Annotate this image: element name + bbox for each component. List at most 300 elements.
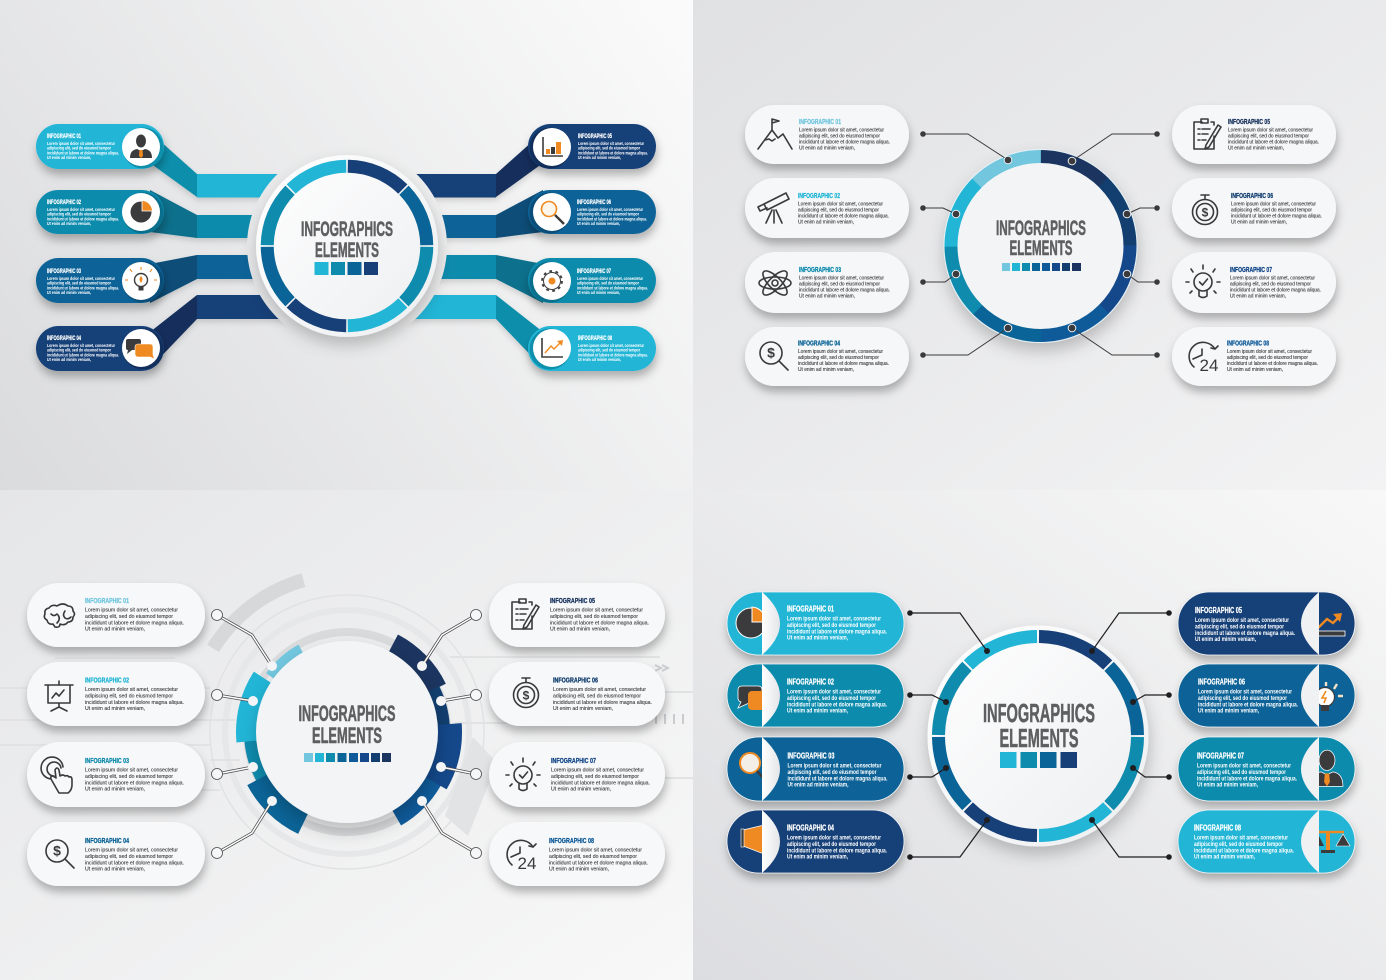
text: infographic 08: Lorem ipsum dolor sit amet, consectetur: [549, 848, 642, 854]
text: infographic 05: Ut enim ad minim veniam,: [550, 627, 610, 633]
pill: infographic 05: [528, 124, 656, 169]
text: infographic 01: Lorem ipsum dolor sit amet, consectetur: [47, 141, 115, 146]
text: infographic 03: adipiscing elit, sed do eiusmod tempor: [85, 774, 173, 780]
text: infographic 02: Ut enim ad minim veniam,: [47, 221, 91, 226]
text: infographic 01: adipiscing elit, sed do eiusmod tempor: [799, 134, 880, 140]
text: infographic 07: INFOGRAPHIC 07: [551, 756, 596, 765]
ribbon 07: [426, 255, 543, 303]
icon: rising arrow: [1316, 613, 1345, 636]
crescent divider: [1301, 810, 1319, 873]
pill: infographic 03: [745, 252, 909, 313]
text: infographic 03: incididunt ut labore et dolore magna aliqua.: [799, 288, 890, 294]
text: infographic 02: Ut enim ad minim veniam,: [787, 709, 848, 715]
text: infographic 07: Ut enim ad minim veniam,: [551, 787, 611, 793]
crescent divider: [1301, 592, 1319, 655]
text: infographic 01: adipiscing elit, sed do eiusmod tempor: [85, 614, 173, 620]
text: infographic 02: adipiscing elit, sed do eiusmod tempor: [47, 212, 111, 217]
title: INFOGRAPHICS: [301, 217, 393, 241]
text: infographic 06: INFOGRAPHIC 06: [1231, 193, 1273, 200]
crescent divider: [762, 664, 780, 727]
pill: infographic 04: [36, 326, 164, 371]
ribbon 02: [150, 190, 267, 238]
icon: businessman: [1311, 750, 1343, 786]
title: INFOGRAPHICS: [996, 217, 1086, 240]
crescent divider: [1301, 737, 1319, 801]
text: infographic 07: incididunt ut labore et dolore magna aliqua.: [577, 285, 648, 290]
text: infographic 04: [85, 836, 184, 873]
text: infographic 05: INFOGRAPHIC 05: [550, 596, 596, 605]
icon: clipboard: [1194, 119, 1221, 149]
text: infographic 05: incididunt ut labore et dolore magna aliqua.: [1195, 631, 1295, 637]
icon: magnifier: [740, 753, 765, 780]
text: infographic 04: Lorem ipsum dolor sit amet, consectetur: [798, 349, 883, 355]
text: infographic 02: [85, 676, 184, 712]
title: [996, 217, 1086, 260]
icon: light bulb: [1316, 682, 1343, 711]
text: infographic 07: adipiscing elit, sed do eiusmod tempor: [1230, 282, 1311, 288]
text: infographic 08: [578, 336, 648, 362]
text: infographic 06: incididunt ut labore et dolore magna aliqua.: [553, 700, 652, 706]
text: infographic 03: [85, 756, 184, 793]
text: infographic 01: Lorem ipsum dolor sit amet, consectetur: [85, 608, 178, 614]
ribbon 05: [396, 132, 543, 198]
text: infographic 03: Lorem ipsum dolor sit amet, consectetur: [85, 768, 178, 774]
text: infographic 08: Ut enim ad minim veniam,: [578, 357, 621, 362]
text: infographic 04: adipiscing elit, sed do eiusmod tempor: [787, 842, 877, 848]
text: infographic 06: Ut enim ad minim veniam,: [553, 706, 613, 712]
pill: infographic 01: [745, 105, 909, 164]
text: infographic 02: incididunt ut labore et dolore magna aliqua.: [85, 700, 184, 706]
text: infographic 08: [549, 836, 648, 873]
text: infographic 01: Lorem ipsum dolor sit amet, consectetur: [787, 616, 882, 622]
text: infographic 03: [47, 269, 119, 295]
text: infographic 03: adipiscing elit, sed do eiusmod tempor: [799, 282, 880, 288]
text: infographic 05: adipiscing elit, sed do eiusmod tempor: [1228, 134, 1309, 140]
pill: infographic 02: [727, 664, 904, 727]
text: infographic 02: adipiscing elit, sed do eiusmod tempor: [85, 694, 173, 700]
text: infographic 05: incididunt ut labore et dolore magna aliqua.: [1228, 140, 1319, 146]
colour key squares: [1000, 752, 1077, 768]
text: infographic 05: adipiscing elit, sed do eiusmod tempor: [550, 614, 638, 620]
title: ELEMENTS: [1000, 723, 1078, 753]
text: infographic 07: [551, 756, 650, 793]
text: infographic 04: Lorem ipsum dolor sit amet, consectetur: [47, 343, 115, 348]
ribbon 08: [396, 295, 543, 368]
text: infographic 06: Lorem ipsum dolor sit amet, consectetur: [1198, 690, 1293, 696]
title: ELEMENTS: [1010, 237, 1072, 260]
text: infographic 04: INFOGRAPHIC 04: [85, 836, 130, 845]
text: infographic 04: Ut enim ad minim veniam,: [787, 855, 848, 861]
icon: bulb with check: [506, 758, 540, 790]
text: infographic 02: [47, 200, 119, 226]
pill: infographic 04: [727, 810, 904, 873]
pill: infographic 07: [489, 742, 665, 807]
title: [983, 698, 1095, 753]
pill: infographic 06: [489, 662, 665, 726]
text: infographic 07: INFOGRAPHIC 07: [577, 269, 611, 275]
text: infographic 06: adipiscing elit, sed do eiusmod tempor: [1198, 696, 1288, 702]
pill: infographic 03: [27, 742, 205, 807]
text: infographic 01: INFOGRAPHIC 01: [799, 119, 841, 126]
crescent divider: [762, 737, 780, 801]
colour key squares: [1002, 263, 1081, 271]
text: infographic 06: [1231, 193, 1322, 226]
text: infographic 02: Ut enim ad minim veniam,: [798, 220, 854, 226]
icon: chat bubbles: [122, 328, 164, 370]
pill: infographic 01: [27, 583, 205, 647]
central disc: [256, 641, 438, 823]
title: INFOGRAPHICS: [983, 698, 1095, 728]
text: infographic 01: Ut enim ad minim veniam,: [787, 636, 848, 642]
text: infographic 03: adipiscing elit, sed do eiusmod tempor: [47, 281, 111, 286]
text: infographic 05: Ut enim ad minim veniam,: [1228, 146, 1284, 152]
central disc with ring: [234, 133, 460, 359]
pill: infographic 07: [1172, 252, 1336, 313]
icon: light bulb: [122, 262, 164, 302]
text: infographic 08: adipiscing elit, sed do eiusmod tempor: [549, 854, 637, 860]
text: infographic 08: adipiscing elit, sed do eiusmod tempor: [1227, 355, 1308, 361]
text: infographic 07: adipiscing elit, sed do eiusmod tempor: [1197, 770, 1287, 776]
text: infographic 05: Lorem ipsum dolor sit amet, consectetur: [1228, 128, 1313, 134]
pill: infographic 08: [1172, 327, 1336, 386]
text: infographic 07: INFOGRAPHIC 07: [1197, 752, 1244, 760]
text: infographic 01: [799, 119, 890, 152]
ribbon 03: [150, 255, 267, 303]
text: infographic 03: INFOGRAPHIC 03: [85, 756, 129, 765]
text: infographic 04: Ut enim ad minim veniam,: [85, 867, 145, 873]
text: infographic 03: Ut enim ad minim veniam,: [85, 787, 145, 793]
icon: pie chart: [736, 607, 766, 638]
text: infographic 08: adipiscing elit, sed do eiusmod tempor: [578, 348, 640, 353]
icon: balance scales: [1312, 832, 1350, 853]
text: infographic 04: Lorem ipsum dolor sit amet, consectetur: [85, 848, 178, 854]
text: infographic 05: incididunt ut labore et dolore magna aliqua.: [578, 150, 648, 155]
title: [298, 701, 396, 748]
text: infographic 07: adipiscing elit, sed do eiusmod tempor: [551, 774, 639, 780]
icon: gear: [530, 262, 571, 302]
text: infographic 01: INFOGRAPHIC 01: [787, 604, 834, 614]
text: infographic 05: incididunt ut labore et dolore magna aliqua.: [550, 620, 649, 626]
crescent divider: [762, 810, 780, 873]
text: infographic 04: incididunt ut labore et dolore magna aliqua.: [787, 848, 887, 854]
connectors: [212, 610, 482, 858]
pill: infographic 04: [745, 327, 909, 386]
text: infographic 04: Ut enim ad minim veniam,: [798, 367, 854, 373]
text: infographic 06: adipiscing elit, sed do eiusmod tempor: [1231, 208, 1312, 214]
text: infographic 08: INFOGRAPHIC 08: [1227, 340, 1269, 348]
text: infographic 04: Lorem ipsum dolor sit amet, consectetur: [787, 836, 882, 842]
text: infographic 03: Ut enim ad minim veniam,: [47, 290, 91, 295]
text: infographic 06: [577, 200, 647, 226]
ribbon 04: [150, 295, 297, 368]
text: infographic 04: incididunt ut labore et dolore magna aliqua.: [798, 361, 889, 367]
pill: infographic 08: [528, 326, 656, 371]
text: infographic 01: adipiscing elit, sed do eiusmod tempor: [787, 623, 877, 629]
text: infographic 01: Lorem ipsum dolor sit amet, consectetur: [799, 128, 884, 134]
text: infographic 02: INFOGRAPHIC 02: [787, 678, 834, 686]
central disc with ring: [897, 595, 1179, 877]
text: infographic 01: Ut enim ad minim veniam,: [47, 155, 91, 160]
text: infographic 04: [798, 340, 889, 373]
pill: infographic 03: [727, 737, 904, 801]
crescent divider: [1301, 664, 1319, 727]
text: infographic 01: incididunt ut labore et dolore magna aliqua.: [799, 140, 890, 146]
text: infographic 04: [787, 824, 887, 861]
text: infographic 04: incididunt ut labore et dolore magna aliqua.: [85, 860, 184, 866]
text: infographic 07: Lorem ipsum dolor sit amet, consectetur: [1197, 764, 1292, 770]
text: infographic 07: Lorem ipsum dolor sit amet, consectetur: [577, 276, 643, 281]
icon: touch hand: [41, 757, 72, 793]
title: INFOGRAPHICS: [298, 701, 396, 726]
text: infographic 06: [1198, 678, 1298, 715]
pill: infographic 07: [528, 258, 656, 303]
icon: bulb with check: [1186, 265, 1220, 298]
text: infographic 01: incididunt ut labore et dolore magna aliqua.: [85, 620, 184, 626]
text: infographic 06: incididunt ut labore et dolore magna aliqua.: [1231, 214, 1322, 220]
icon: presentation board: [45, 681, 73, 711]
crescent divider: [762, 592, 780, 655]
text: infographic 05: INFOGRAPHIC 05: [578, 134, 612, 140]
icon: stopwatch: [1192, 195, 1218, 224]
text: infographic 07: Lorem ipsum dolor sit amet, consectetur: [551, 768, 644, 774]
icon: atom: [759, 267, 791, 299]
text: infographic 06: Lorem ipsum dolor sit amet, consectetur: [577, 207, 643, 212]
icon: mountain flag: [758, 119, 792, 149]
pill: infographic 03: [36, 258, 164, 303]
icon: brain: [44, 604, 74, 627]
text: infographic 06: Lorem ipsum dolor sit amet, consectetur: [1231, 202, 1316, 208]
pill: infographic 06: [528, 190, 656, 234]
central disc with ring: [914, 119, 1167, 373]
icon: stopwatch: [514, 678, 538, 708]
text: infographic 03: Ut enim ad minim veniam,: [799, 294, 855, 300]
text: infographic 08: incididunt ut labore et dolore magna aliqua.: [549, 860, 648, 866]
pill: infographic 04: [27, 822, 205, 886]
icon: dollar magnifier: [760, 342, 788, 370]
text: infographic 08: adipiscing elit, sed do eiusmod tempor: [1194, 842, 1284, 848]
text: infographic 07: Ut enim ad minim veniam,: [1230, 294, 1286, 300]
text: infographic 01: incididunt ut labore et dolore magna aliqua.: [787, 629, 887, 635]
text: infographic 02: incididunt ut labore et dolore magna aliqua.: [798, 214, 889, 220]
text: infographic 05: Lorem ipsum dolor sit amet, consectetur: [578, 141, 644, 146]
pill: infographic 06: [1178, 664, 1355, 727]
text: infographic 05: [1228, 119, 1319, 152]
pill: infographic 05: [1178, 592, 1355, 655]
pill: infographic 02: [36, 190, 164, 234]
text: infographic 02: INFOGRAPHIC 02: [85, 676, 129, 684]
text: infographic 03: INFOGRAPHIC 03: [799, 267, 841, 274]
text: infographic 08: Lorem ipsum dolor sit amet, consectetur: [1194, 836, 1289, 842]
text: infographic 06: incididunt ut labore et dolore magna aliqua.: [1198, 702, 1298, 708]
text: infographic 05: [1195, 606, 1295, 643]
text: infographic 03: INFOGRAPHIC 03: [788, 752, 835, 760]
title: ELEMENTS: [312, 723, 382, 748]
text: infographic 08: Ut enim ad minim veniam,: [549, 867, 609, 873]
text: infographic 05: Ut enim ad minim veniam,: [1195, 637, 1256, 643]
text: infographic 05: adipiscing elit, sed do eiusmod tempor: [1195, 624, 1285, 630]
text: infographic 02: adipiscing elit, sed do eiusmod tempor: [798, 208, 879, 214]
pill: infographic 02: [745, 178, 909, 238]
text: infographic 08: Lorem ipsum dolor sit amet, consectetur: [578, 343, 644, 348]
text: infographic 01: Ut enim ad minim veniam,: [799, 146, 855, 152]
icon: stopwatch: $: [523, 688, 530, 702]
icon: 24-hour clock: 24: [1200, 356, 1218, 375]
pill: infographic 08: [489, 822, 665, 886]
icon: growth chart: [530, 328, 571, 370]
text: infographic 06: [553, 676, 652, 712]
icon: stopwatch: $: [1202, 206, 1209, 220]
text: infographic 02: adipiscing elit, sed do eiusmod tempor: [787, 696, 877, 702]
text: infographic 05: [550, 596, 649, 633]
text: infographic 08: incididunt ut labore et dolore magna aliqua.: [1194, 848, 1294, 854]
text: infographic 08: incididunt ut labore et dolore magna aliqua.: [578, 352, 648, 357]
ribbon 01: [150, 132, 297, 198]
text: infographic 03: INFOGRAPHIC 03: [47, 269, 81, 275]
text: infographic 07: Ut enim ad minim veniam,: [577, 290, 620, 295]
text: infographic 07: [1197, 752, 1297, 789]
panel: bottom-right coloured pills infographic: [693, 490, 1386, 980]
text: infographic 06: INFOGRAPHIC 06: [553, 676, 598, 684]
text: infographic 02: INFOGRAPHIC 02: [798, 193, 840, 200]
ribbon 06: [426, 190, 543, 238]
text: infographic 04: [47, 336, 119, 362]
text: infographic 03: incididunt ut labore et dolore magna aliqua.: [85, 780, 184, 786]
connectors: [907, 610, 1172, 860]
panel: bottom-left circuit infographic: [0, 490, 693, 980]
text: infographic 04: adipiscing elit, sed do eiusmod tempor: [798, 355, 879, 361]
text: infographic 08: Lorem ipsum dolor sit amet, consectetur: [1227, 349, 1312, 355]
segmented ring: [214, 599, 480, 865]
icon: 24-hour clock: [1189, 342, 1218, 375]
text: infographic 06: Ut enim ad minim veniam,: [1198, 709, 1259, 715]
icon: dollar magnifier: [46, 840, 74, 868]
text: infographic 06: INFOGRAPHIC 06: [1198, 678, 1245, 686]
text: infographic 05: Lorem ipsum dolor sit amet, consectetur: [550, 608, 643, 614]
icon: dollar magnifier: $: [767, 344, 775, 360]
icon: telescope: [758, 193, 789, 223]
text: infographic 03: Lorem ipsum dolor sit amet, consectetur: [788, 764, 882, 770]
text: infographic 02: [798, 193, 889, 226]
colour key squares: [314, 262, 378, 275]
text: infographic 06: INFOGRAPHIC 06: [577, 200, 611, 206]
icon: businessman: [122, 128, 164, 168]
text: infographic 03: Ut enim ad minim veniam,: [788, 783, 849, 789]
text: infographic 06: incididunt ut labore et dolore magna aliqua.: [577, 216, 647, 221]
text: infographic 06: Ut enim ad minim veniam,: [577, 221, 620, 226]
text: infographic 05: adipiscing elit, sed do eiusmod tempor: [578, 146, 640, 151]
text: infographic 07: adipiscing elit, sed do eiusmod tempor: [577, 281, 639, 286]
text: infographic 04: Ut enim ad minim veniam,: [47, 357, 91, 362]
icon: dollar magnifier: $: [53, 842, 61, 858]
text: infographic 01: [787, 604, 887, 642]
panel: top-left ribbon infographic: [0, 0, 693, 490]
text: infographic 02: incididunt ut labore et dolore magna aliqua.: [47, 216, 119, 221]
icon: pie chart: [122, 192, 164, 234]
text: infographic 05: Ut enim ad minim veniam,: [578, 155, 621, 160]
text: infographic 04: INFOGRAPHIC 04: [787, 824, 834, 832]
text: infographic 02: INFOGRAPHIC 02: [47, 200, 81, 206]
text: infographic 08: incididunt ut labore et dolore magna aliqua.: [1227, 361, 1318, 367]
text: infographic 07: Ut enim ad minim veniam,: [1197, 783, 1258, 789]
icon: 24-hour clock: 24: [518, 854, 536, 873]
panel: top-right white pills infographic: [693, 0, 1386, 490]
pill: infographic 06: [1172, 178, 1336, 238]
pill: infographic 08: [1178, 810, 1355, 873]
text: infographic 08: [1227, 340, 1318, 373]
pill: infographic 01: [36, 124, 164, 169]
icon: magnifier: [530, 192, 571, 234]
text: infographic 02: [787, 678, 887, 715]
text: infographic 02: incididunt ut labore et dolore magna aliqua.: [787, 702, 887, 708]
text: infographic 04: adipiscing elit, sed do eiusmod tempor: [47, 348, 111, 353]
title: ELEMENTS: [315, 238, 379, 262]
text: infographic 01: [47, 134, 119, 160]
text: infographic 03: Lorem ipsum dolor sit amet, consectetur: [47, 276, 115, 281]
icon: megaphone: [741, 825, 764, 854]
title: [301, 217, 393, 262]
text: infographic 06: Ut enim ad minim veniam,: [1231, 220, 1287, 226]
text: infographic 07: INFOGRAPHIC 07: [1230, 267, 1272, 274]
text: infographic 02: Lorem ipsum dolor sit amet, consectetur: [85, 687, 178, 693]
text: infographic 08: INFOGRAPHIC 08: [1194, 824, 1241, 832]
text: infographic 07: Lorem ipsum dolor sit amet, consectetur: [1230, 276, 1315, 282]
text: infographic 05: INFOGRAPHIC 05: [1195, 606, 1242, 615]
text: infographic 07: [577, 269, 648, 295]
text: infographic 03: adipiscing elit, sed do eiusmod tempor: [788, 770, 877, 776]
text: infographic 03: [788, 752, 888, 789]
text: infographic 04: adipiscing elit, sed do eiusmod tempor: [85, 854, 173, 860]
text: infographic 04: INFOGRAPHIC 04: [47, 336, 81, 342]
text: infographic 03: Lorem ipsum dolor sit amet, consectetur: [799, 276, 884, 282]
text: infographic 06: Lorem ipsum dolor sit amet, consectetur: [553, 687, 646, 693]
pill: infographic 07: [1178, 737, 1355, 801]
icon: bar chart: [530, 128, 571, 168]
pill: infographic 05: [489, 583, 665, 647]
text: infographic 01: INFOGRAPHIC 01: [47, 134, 81, 140]
icon: clipboard: [512, 599, 539, 629]
text: infographic 02: Lorem ipsum dolor sit amet, consectetur: [798, 202, 883, 208]
text: infographic 01: [85, 596, 184, 633]
pill: infographic 05: [1172, 105, 1336, 164]
text: infographic 01: Ut enim ad minim veniam,: [85, 627, 145, 633]
circuit background pattern: [0, 514, 693, 950]
text: infographic 08: [1194, 824, 1294, 861]
text: infographic 07: [1230, 267, 1321, 300]
text: infographic 01: adipiscing elit, sed do eiusmod tempor: [47, 146, 111, 151]
pill: infographic 02: [27, 662, 205, 726]
icon: chat bubbles: [738, 686, 768, 710]
text: infographic 05: [578, 134, 648, 160]
text: infographic 08: Ut enim ad minim veniam,: [1194, 855, 1255, 861]
colour key squares: [304, 753, 391, 762]
icon: 24-hour clock: [507, 840, 536, 873]
text: infographic 05: INFOGRAPHIC 05: [1228, 119, 1270, 126]
pill: infographic 01: [727, 592, 904, 655]
text: infographic 02: Lorem ipsum dolor sit amet, consectetur: [787, 690, 882, 696]
text: infographic 07: incididunt ut labore et dolore magna aliqua.: [1197, 776, 1297, 782]
text: infographic 04: INFOGRAPHIC 04: [798, 340, 840, 348]
text: infographic 01: incididunt ut labore et dolore magna aliqua.: [47, 150, 119, 155]
text: infographic 07: incididunt ut labore et dolore magna aliqua.: [551, 780, 650, 786]
text: infographic 03: incididunt ut labore et dolore magna aliqua.: [788, 776, 888, 782]
text: infographic 02: Lorem ipsum dolor sit amet, consectetur: [47, 207, 115, 212]
text: infographic 03: incididunt ut labore et dolore magna aliqua.: [47, 285, 119, 290]
text: infographic 06: adipiscing elit, sed do eiusmod tempor: [577, 212, 639, 217]
connectors: [920, 131, 1160, 358]
text: infographic 07: incididunt ut labore et dolore magna aliqua.: [1230, 288, 1321, 294]
text: infographic 08: Ut enim ad minim veniam,: [1227, 367, 1283, 373]
text: infographic 02: Ut enim ad minim veniam,: [85, 706, 145, 712]
